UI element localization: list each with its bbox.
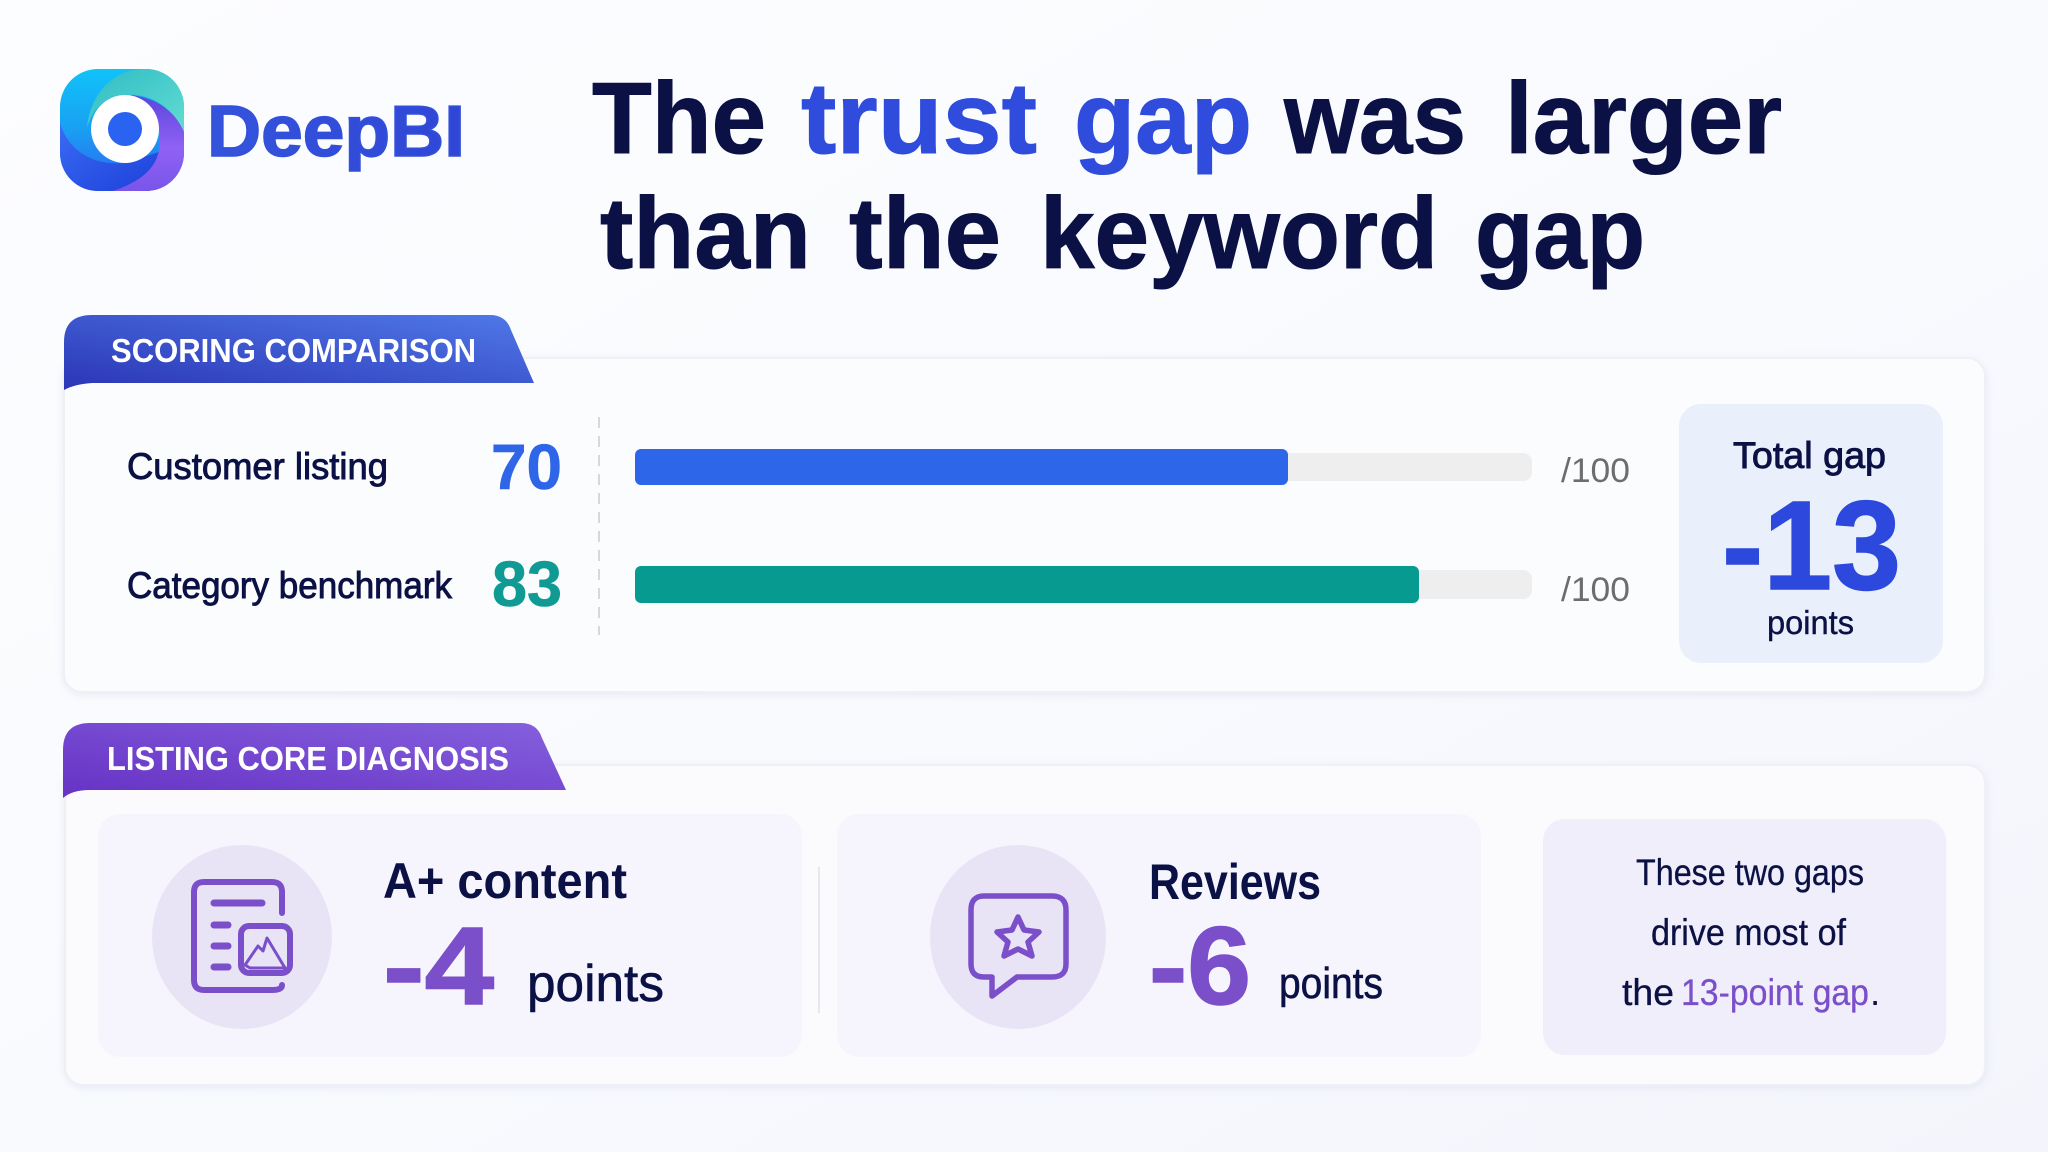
unit: points: points [1279,959,1383,1008]
callout: total gap: -13 [1722,475,1901,616]
title: trust [801,63,1037,175]
label: A+ content: A+ content [383,853,627,909]
unit: points: points [527,955,664,1013]
title: keyword [1040,178,1438,290]
callout: summary note: drive most of [1651,912,1847,953]
icon: document with image [194,882,290,990]
title: than [600,178,811,290]
tab: scoring comparison: SCORING COMPARISON [111,332,476,369]
icon: DeepBI swirl eye [60,69,184,191]
wordmark: DeepBI [207,92,465,172]
title: gap [1475,178,1645,290]
value: -6: -6 [1149,905,1251,1028]
tab: listing core diagnosis [63,723,566,798]
title: the [849,178,1001,290]
callout: summary note: These two gaps [1636,852,1864,893]
callout: summary note: the [1622,972,1674,1013]
callout: total gap [1679,404,1943,663]
title: was [1283,63,1466,175]
axis label: /100: /100 [1561,571,1630,609]
title: gap [1074,63,1252,175]
logo: DeepBI [60,69,465,191]
bar: category benchmark 83 of 100 [635,566,1532,603]
title [592,63,1782,290]
axis label: /100: /100 [1561,452,1630,490]
row label: customer listing: Customer listing [127,446,388,487]
row label: category benchmark: Category benchmark [127,565,452,606]
tab: listing core diagnosis: LISTING CORE DIAGNOSIS [107,740,509,777]
score: 83: 83 [492,548,562,620]
bar: customer listing 70 of 100 [635,449,1532,485]
callout: total gap: points [1767,604,1854,641]
callout: summary note: . [1870,972,1880,1013]
title: larger [1505,63,1782,175]
score: 70: 70 [491,431,562,503]
callout: summary note: 13-point gap [1681,972,1869,1013]
title: The [592,63,766,175]
panel: listing core diagnosis [63,723,1985,1085]
label: reviews: Reviews [1149,854,1321,910]
card: reviews [837,814,1481,1057]
callout: summary note [1543,819,1946,1055]
panel: scoring comparison [64,315,1985,692]
icon: speech bubble with star [971,896,1066,996]
tab: scoring comparison [64,315,534,390]
card: A+ content [98,814,802,1057]
value: -4: -4 [383,905,494,1028]
callout: total gap: Total gap [1733,435,1886,476]
